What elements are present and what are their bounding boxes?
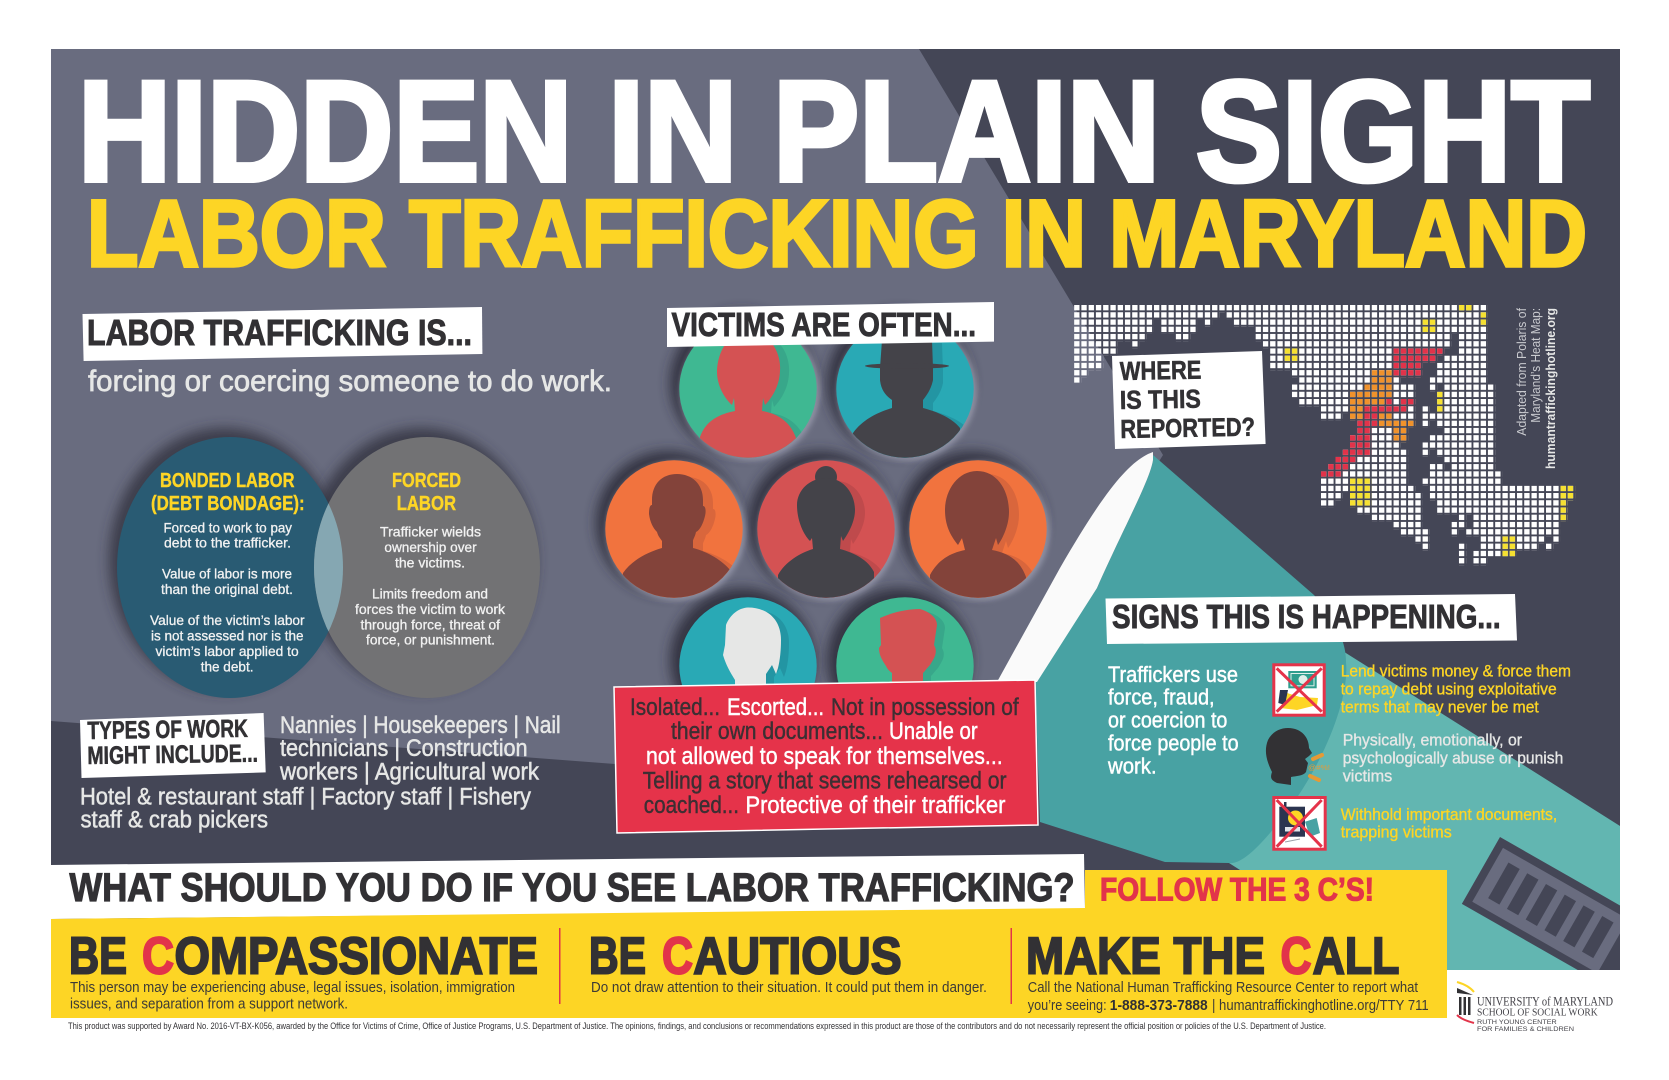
bonded labor text — [150, 470, 305, 674]
flashlight white edge — [997, 452, 1153, 682]
divider one — [559, 928, 560, 1004]
forced labor text: LABOR — [397, 493, 456, 515]
types of work list: Nannies | Housekeepers | Nail — [280, 712, 561, 739]
panel: victims avatars — [596, 302, 1050, 833]
forced labor text: Limits freedom and — [372, 586, 488, 602]
sign: abuse: psychologically abuse or punish — [1343, 749, 1563, 767]
forced labor text: force, or punishment. — [366, 631, 495, 647]
map source note: humantraffickinghotline.org — [1543, 308, 1558, 469]
sign: lend money — [1341, 663, 1571, 717]
follow the 3 Cs: FOLLOW THE 3 C’S! — [1100, 872, 1374, 908]
logo text: UNIVERSITY of MARYLAND — [1477, 994, 1613, 1009]
icon: shouting head: @#%! — [1308, 765, 1330, 772]
icon: money lending crossed out — [1274, 665, 1324, 715]
bonded labor text: is not assessed nor is the — [151, 628, 304, 644]
forced labor text: FORCED — [392, 470, 461, 492]
column: make the call: 1-888-373-7888 — [1110, 997, 1208, 1014]
signs intro text: work. — [1107, 754, 1157, 778]
types of work list: workers | Agricultural work — [279, 759, 540, 786]
bonded labor text: victim’s labor applied to — [156, 643, 299, 659]
where is this reported tag: IS THIS — [1120, 384, 1201, 415]
sign: abuse: Physically, emotionally, or — [1343, 732, 1522, 750]
avatar: short hair man — [605, 460, 743, 613]
light beam: pale teal — [1229, 643, 1620, 970]
types of work list: staff & crab pickers — [80, 806, 268, 834]
column: make the call: you’re seeing: — [1028, 997, 1107, 1014]
icon: passport crossed out — [1274, 798, 1325, 849]
bonded labor text: Forced to work to pay — [164, 520, 292, 536]
types of work tag: MIGHT INCLUDE... — [87, 740, 258, 770]
column: make the call: ALL — [1313, 928, 1399, 986]
column: make the call: C — [1280, 928, 1312, 986]
signs intro text: force, fraud, — [1108, 685, 1215, 710]
light beam: dark teal cone — [1035, 455, 1346, 863]
signs intro text: Traffickers use — [1108, 662, 1238, 687]
sign: lend money: Lend victims money & force them — [1341, 663, 1571, 681]
drain grate — [1462, 837, 1620, 970]
funding disclaimer: This product was supported by Award No. 2016-VT-BX-K056, awarded by the Office for Victims of Crime, Office of Justice Programs, U.S. Department of Justice. The opinions, findings, and conclusions or recommendations expressed in this product are those of the contributors and do not necessarily represent the official position or policies of the U.S. Department of Justice. — [68, 1021, 1326, 1031]
avatar: woman bob hair — [909, 460, 1047, 613]
avatar: woman long hair — [679, 344, 817, 458]
venn diagram: bonded and forced labor — [109, 428, 540, 698]
map source note — [1514, 308, 1558, 469]
types of work tag: TYPES OF WORK — [87, 715, 248, 745]
bonded labor text: the debt. — [201, 658, 254, 674]
forced labor text: Trafficker wields — [380, 524, 481, 540]
forced labor text — [355, 470, 506, 647]
map source note: Adapted from Polaris of — [1514, 308, 1529, 436]
panel: labor trafficking definition — [82, 307, 612, 398]
column: make the call: | humantraffickinghotline.org/TTY 711 — [1212, 997, 1429, 1014]
panel: signs this is happening — [1106, 594, 1571, 849]
red callout: victim traits — [614, 680, 1038, 833]
signs heading tag: SIGNS THIS IS HAPPENING... — [1112, 598, 1501, 635]
bonded labor text: Value of labor is more — [162, 566, 292, 582]
bonded labor text: BONDED LABOR — [160, 470, 295, 492]
where is this reported tag: WHERE — [1120, 355, 1202, 386]
column: be compassionate: issues, and separation from a support network. — [70, 995, 348, 1012]
column: be compassionate: C — [142, 928, 174, 986]
signs intro text — [1107, 662, 1239, 778]
red callout: victim traits: Escorted... — [727, 694, 824, 721]
avatar: light gray figure — [679, 597, 817, 686]
panel: what should you do — [51, 854, 1447, 1018]
types of work tag — [80, 713, 266, 778]
sign: abuse: victims — [1343, 768, 1392, 786]
column: make the call: MAKE THE — [1026, 928, 1265, 986]
logo text: FOR FAMILIES & CHILDREN — [1477, 1027, 1574, 1033]
red callout: victim traits: Not in possession of — [831, 694, 1019, 721]
heading tag: LABOR TRAFFICKING IS... — [87, 312, 472, 353]
forced labor text: the victims. — [395, 554, 465, 570]
bonded labor text: than the original debt. — [161, 581, 293, 597]
avatar shadows — [596, 311, 1050, 732]
icon: shouting head — [1266, 728, 1330, 785]
forced labor text: forces the victim to work — [355, 601, 506, 617]
column: be compassionate: OMPASSIONATE — [174, 928, 538, 986]
red callout: victim traits: Isolated... — [630, 694, 720, 721]
logo mark — [1457, 982, 1474, 1023]
red callout: victim traits: Telling a story that seems rehearsed or — [643, 768, 1007, 795]
red callout: victim traits: their own documents... — [671, 718, 883, 745]
column: make the call — [1026, 928, 1429, 1014]
signs intro text: or coercion to — [1108, 708, 1227, 733]
victims heading tag: VICTIMS ARE OFTEN... — [672, 306, 976, 343]
column: make the call: Call the National Human Trafficking Resource Center to report what — [1028, 979, 1419, 996]
sign: abuse — [1343, 732, 1563, 786]
bonded labor text: debt to the trafficker. — [164, 535, 291, 551]
column: be cautious — [589, 928, 987, 996]
red callout: victim traits: not allowed to speak for themselves... — [646, 743, 1003, 770]
sign: withhold documents — [1341, 806, 1557, 842]
definition text: forcing or coercing someone to do work. — [88, 365, 612, 398]
bonded labor text: (DEBT BONDAGE): — [151, 493, 305, 515]
sign: withhold documents: Withhold important documents, — [1341, 806, 1557, 824]
column: be compassionate: This person may be experiencing abuse, legal issues, isolation, immigration — [70, 979, 515, 996]
sign: lend money: terms that may never be met — [1341, 699, 1539, 717]
avatar: woman with bun — [757, 460, 895, 613]
divider two — [1010, 928, 1012, 1004]
sign: withhold documents: trapping victims — [1341, 824, 1452, 842]
map source note: Maryland’s Heat Map: — [1528, 308, 1543, 423]
column: be cautious: C — [662, 928, 693, 986]
panel: types of work — [80, 712, 561, 834]
logo text: RUTH YOUNG CENTER — [1477, 1020, 1557, 1026]
types of work list — [80, 712, 561, 834]
types of work list: technicians | Construction — [280, 735, 528, 762]
signs heading tag — [1106, 594, 1517, 644]
column: be cautious: Do not draw attention to their situation. It could put them in danger. — [591, 979, 987, 996]
logo: University of Maryland School of Social Work — [1457, 982, 1613, 1033]
column: be compassionate — [69, 928, 538, 1012]
logo text: SCHOOL OF SOCIAL WORK — [1477, 1007, 1598, 1019]
avatar: red figure on green — [836, 597, 974, 682]
where is this reported tag: REPORTED? — [1120, 412, 1255, 444]
sign: lend money: to repay debt using exploitative — [1341, 681, 1557, 699]
avatar: man in hat — [836, 342, 974, 458]
column: be cautious: BE — [589, 928, 646, 986]
column: be compassionate: BE — [69, 928, 127, 986]
logo text — [1477, 994, 1613, 1033]
red callout: victim traits: Protective of their trafficker — [746, 792, 1005, 819]
types of work list: Hotel & restaurant staff | Factory staff | Fishery — [80, 784, 531, 810]
heat map of Maryland — [1074, 305, 1575, 565]
column: be cautious: AUTIOUS — [693, 928, 902, 986]
red callout: victim traits: Unable or — [889, 718, 978, 745]
bonded labor text: Value of the victim’s labor — [150, 612, 305, 628]
forced labor text: ownership over — [384, 539, 477, 555]
heading tag — [82, 307, 482, 361]
white banner and yellow panel — [51, 854, 1447, 1018]
forced labor text: through force, threat of — [360, 616, 500, 632]
where is this reported tag — [1112, 351, 1266, 449]
red callout: victim traits: coached... — [644, 792, 739, 819]
question heading: WHAT SHOULD YOU DO IF YOU SEE LABOR TRAFFICKING? — [70, 866, 1075, 910]
signs intro text: force people to — [1108, 731, 1239, 756]
